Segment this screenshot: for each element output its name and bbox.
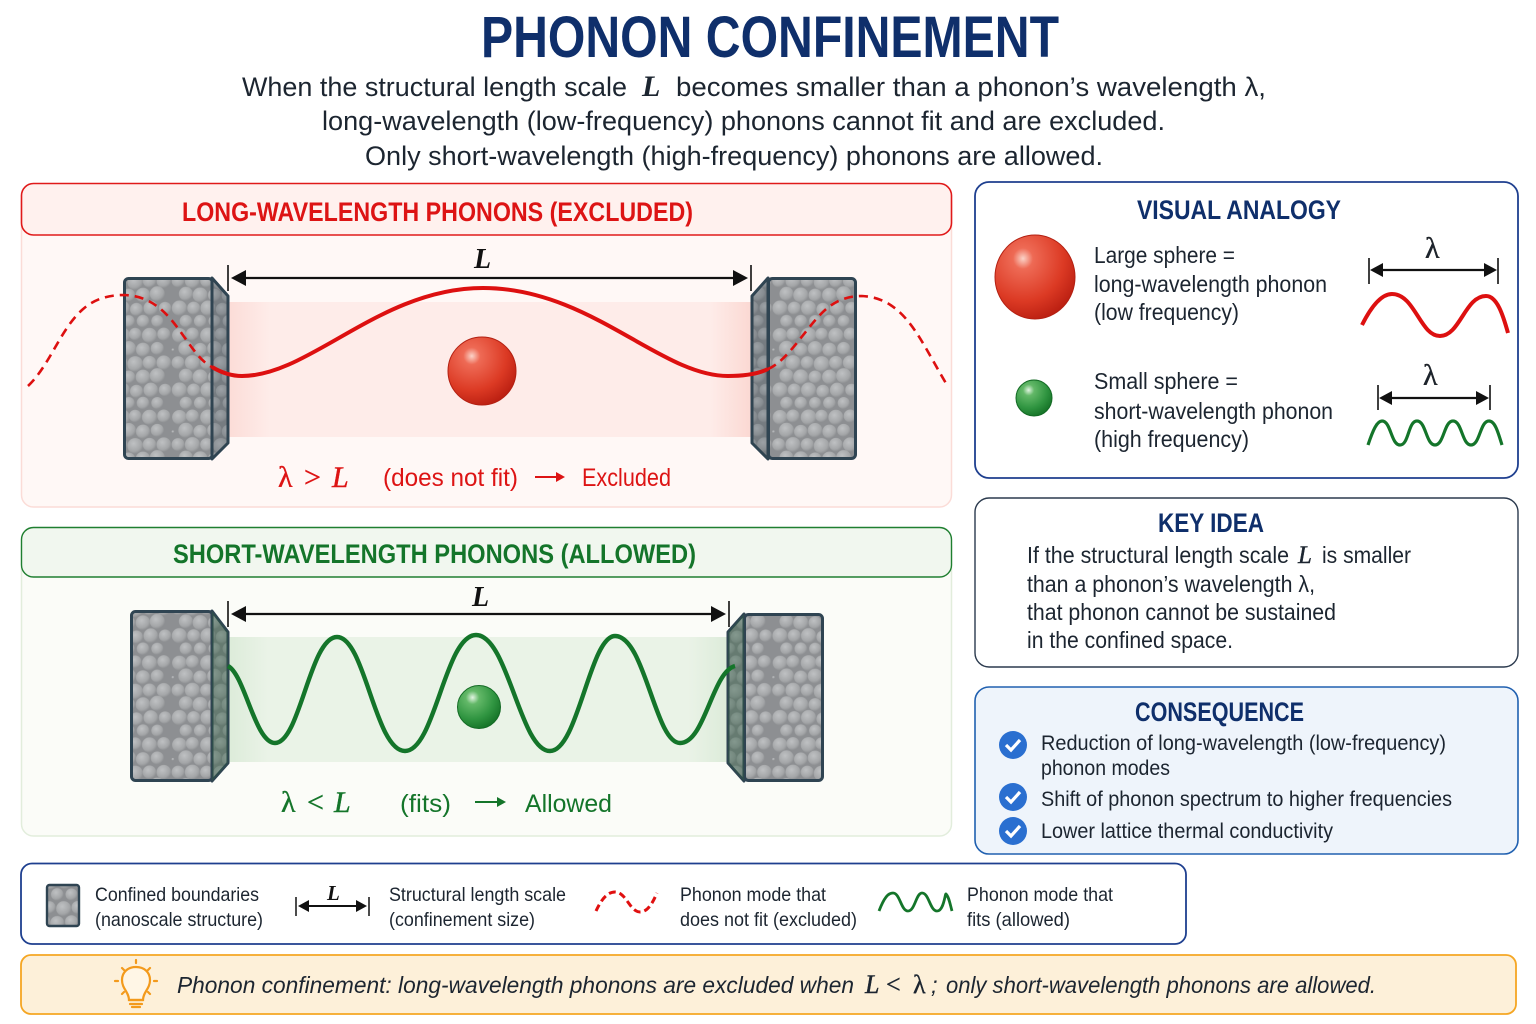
condition: allowed: λ bbox=[281, 786, 296, 819]
condition: excluded: λ bbox=[278, 461, 293, 494]
legend item: confined boundaries: (nanoscale structure) bbox=[95, 909, 263, 931]
summary banner bbox=[21, 955, 1516, 1014]
panel: short-wavelength phonons allowed bbox=[22, 528, 952, 836]
panel: visual analogy bbox=[975, 182, 1518, 478]
legend item: excluded mode: Phonon mode that bbox=[680, 884, 827, 906]
condition: allowed: < bbox=[307, 786, 324, 819]
confinement band: allowed bbox=[228, 637, 728, 762]
condition: allowed: (fits) bbox=[400, 790, 451, 818]
item: spectrum shift: Shift of phonon spectrum to higher frequencies bbox=[1041, 788, 1452, 811]
text: small sphere bbox=[1094, 368, 1333, 452]
right boundary block bbox=[752, 278, 856, 459]
text: large sphere: (low frequency) bbox=[1094, 299, 1239, 325]
panel header: excluded bbox=[22, 184, 952, 235]
large red sphere bbox=[448, 337, 516, 405]
text: summary: ; bbox=[931, 972, 938, 998]
legend item: allowed mode: Phonon mode that bbox=[967, 884, 1114, 906]
condition: allowed: L bbox=[333, 786, 351, 819]
icon: large sphere bbox=[995, 235, 1075, 319]
text: small sphere: (high frequency) bbox=[1094, 426, 1249, 452]
intro text: When the structural length scale bbox=[242, 72, 627, 102]
condition: allowed: Allowed bbox=[525, 790, 612, 818]
text: summary: only short-wavelength phonons are allowed. bbox=[946, 972, 1376, 998]
legend item: structural length scale: (confinement size) bbox=[389, 909, 535, 931]
long wavelength diagram: λ bbox=[1425, 232, 1440, 265]
icon: light bulb bbox=[115, 960, 157, 1007]
panel: key idea bbox=[975, 498, 1518, 667]
short wavelength diagram bbox=[1368, 359, 1502, 445]
legend bbox=[21, 864, 1186, 944]
item: reduction of modes bbox=[999, 731, 1446, 780]
dimension arrow L: L bbox=[471, 582, 489, 613]
title: PHONON CONFINEMENT bbox=[481, 5, 1059, 70]
small green sphere bbox=[458, 686, 500, 728]
item: reduction of modes: Reduction of long-wavelength (low-frequency) bbox=[1041, 732, 1446, 755]
condition: excluded: L bbox=[331, 461, 349, 494]
legend item: excluded mode bbox=[596, 884, 857, 931]
legend item: confined boundaries bbox=[47, 884, 263, 931]
dimension arrow L: L bbox=[473, 244, 491, 275]
left boundary block bbox=[132, 611, 228, 781]
dimension arrow L bbox=[228, 582, 729, 627]
text: small sphere: short-wavelength phonon bbox=[1094, 398, 1333, 424]
legend item: allowed mode bbox=[879, 884, 1114, 931]
text: key idea: If the structural length scale bbox=[1027, 542, 1289, 568]
text: large sphere: Large sphere = bbox=[1094, 242, 1235, 268]
text: summary: λ bbox=[913, 970, 926, 999]
intro text: becomes smaller than a phonon’s wavelength λ, bbox=[676, 72, 1266, 102]
short wavelength diagram: λ bbox=[1423, 359, 1438, 392]
intro text: long-wavelength (low-frequency) phonons cannot fit and are excluded. bbox=[322, 106, 1165, 136]
item: reduction of modes: phonon modes bbox=[1041, 757, 1170, 780]
text: summary: < bbox=[886, 970, 901, 999]
dimension arrow L bbox=[228, 244, 751, 291]
intro text bbox=[242, 70, 1266, 171]
confinement band: excluded bbox=[228, 302, 752, 437]
condition: excluded: > bbox=[304, 461, 321, 494]
text: key idea: that phonon cannot be sustained bbox=[1027, 599, 1336, 625]
condition: allowed bbox=[281, 786, 612, 819]
legend item: structural length scale: L bbox=[326, 881, 340, 905]
legend item: confined boundaries: Confined boundaries bbox=[95, 884, 259, 906]
panel header: allowed: SHORT-WAVELENGTH PHONONS (ALLOWED) bbox=[173, 539, 696, 569]
panel: long-wavelength phonons excluded bbox=[22, 184, 952, 507]
icon: small sphere bbox=[1016, 380, 1052, 416]
wave: does not fit bbox=[28, 288, 947, 386]
legend item: allowed mode: fits (allowed) bbox=[967, 909, 1070, 931]
text: key idea: than a phonon’s wavelength λ, bbox=[1027, 571, 1315, 597]
condition: excluded bbox=[278, 461, 671, 494]
item: thermal conductivity: Lower lattice thermal conductivity bbox=[1041, 820, 1333, 843]
text: large sphere: long-wavelength phonon bbox=[1094, 271, 1327, 297]
heading: visual analogy: VISUAL ANALOGY bbox=[1137, 195, 1341, 225]
text: key idea: is smaller bbox=[1322, 542, 1411, 568]
right boundary block bbox=[728, 614, 822, 781]
heading: key idea: KEY IDEA bbox=[1158, 508, 1264, 538]
heading: consequence: CONSEQUENCE bbox=[1135, 697, 1304, 727]
condition: excluded: Excluded bbox=[582, 464, 671, 492]
text: key idea bbox=[1027, 542, 1411, 653]
text: small sphere: Small sphere = bbox=[1094, 368, 1238, 394]
text: summary bbox=[177, 970, 1376, 999]
intro text: Only short-wavelength (high-frequency) phonons are allowed. bbox=[365, 141, 1103, 171]
wave: fits bbox=[228, 635, 735, 751]
item: thermal conductivity bbox=[999, 817, 1333, 845]
text: key idea: in the confined space. bbox=[1027, 627, 1233, 653]
legend item: structural length scale bbox=[296, 881, 566, 931]
legend item: structural length scale: Structural length scale bbox=[389, 884, 566, 906]
panel header: allowed bbox=[22, 528, 952, 577]
text: summary: Phonon confinement: long-wavelength phonons are excluded when bbox=[177, 972, 854, 998]
panel: consequence bbox=[975, 687, 1518, 854]
panel header: excluded: LONG-WAVELENGTH PHONONS (EXCLUDED) bbox=[182, 197, 693, 227]
text: summary: L bbox=[864, 970, 879, 999]
left boundary block bbox=[124, 278, 228, 459]
intro text: L bbox=[641, 70, 660, 103]
legend item: excluded mode: does not fit (excluded) bbox=[680, 909, 857, 931]
long wavelength diagram bbox=[1362, 232, 1508, 336]
condition: excluded: (does not fit) bbox=[383, 464, 518, 492]
text: large sphere bbox=[1094, 242, 1327, 325]
text: key idea: L bbox=[1297, 542, 1312, 569]
